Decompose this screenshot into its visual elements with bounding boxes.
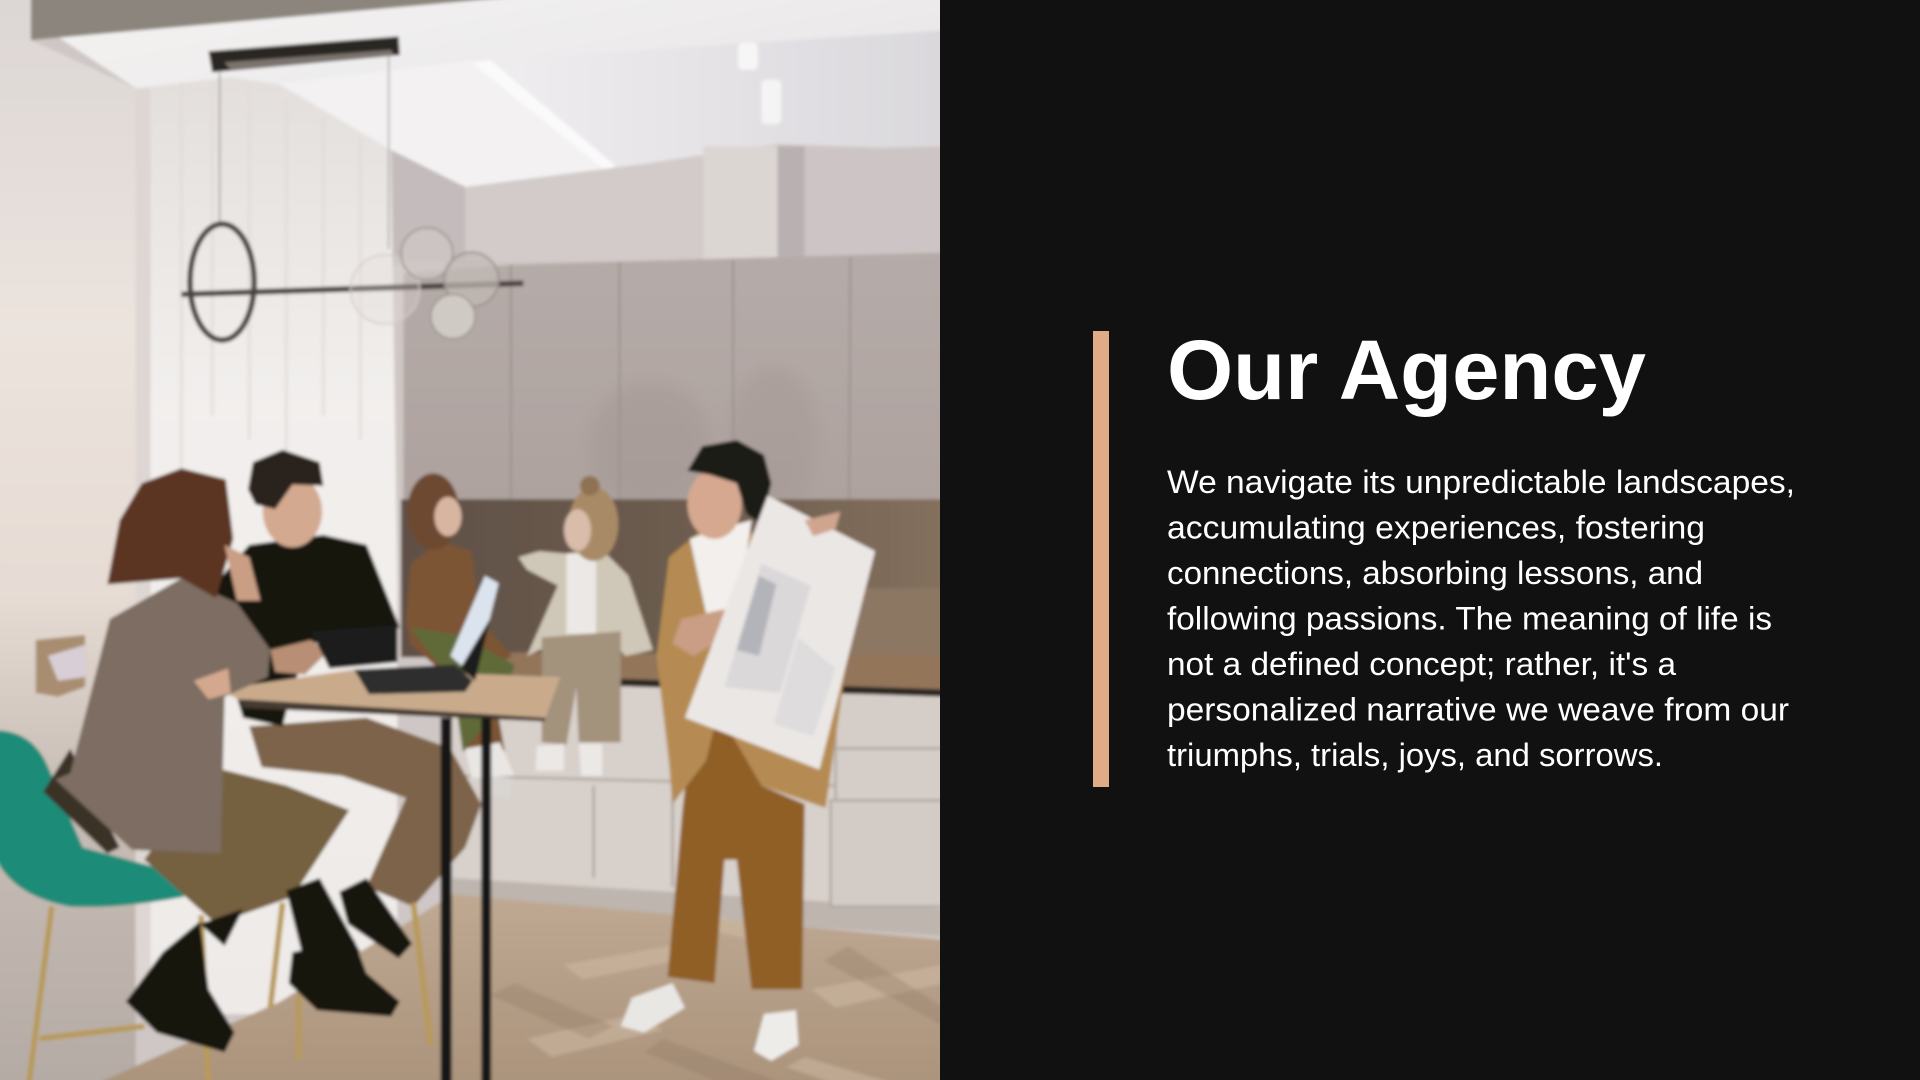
heading: Our Agency [1167,323,1646,417]
body paragraph: personalized narrative we weave from our [1167,692,1789,728]
pendant lamp [181,36,523,340]
kitchen wall cabinets [404,252,944,514]
girl on counter with brown jacket [406,473,515,798]
seated woman in tweed blazer [43,468,360,965]
laptop [354,576,499,694]
curtain [136,77,397,1014]
room background [0,0,944,1080]
body paragraph: We navigate its unpredictable landscapes, [1167,464,1795,500]
body paragraph: following passions. The meaning of life is [1167,600,1772,636]
wooden herringbone floor [95,894,944,1080]
accent bar [1093,331,1109,787]
body paragraph: triumphs, trials, joys, and sorrows. [1167,737,1663,773]
backsplash, counter and lower cabinets [401,499,944,936]
body paragraph [1167,464,1795,773]
dining table [218,670,560,1080]
man in black shirt [206,450,481,958]
architectural floor plan paper [685,496,875,770]
body paragraph: accumulating experiences, fostering [1167,510,1705,546]
girl on counter with cream jacket [518,476,653,776]
green velvet chair [0,730,431,1080]
wall shelf [36,635,85,697]
body paragraph: not a defined concept; rather, it's a [1167,646,1676,682]
standing woman presenting floor plan [621,440,850,1061]
woman's black boots [126,921,400,1052]
body paragraph: connections, absorbing lessons, and [1167,555,1703,591]
panel: interior photo of family and agency designer in a kitchen [0,0,940,1080]
